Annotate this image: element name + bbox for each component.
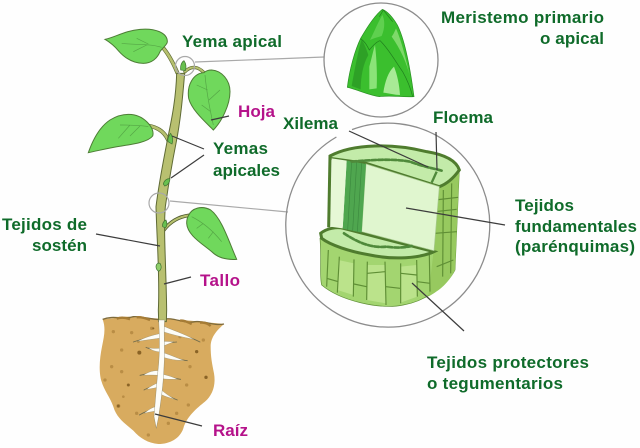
label: meristemo primario: Meristemo primario [441,8,604,27]
label: yema apical: Yema apical [182,32,282,51]
label: sosten: sostén [32,236,87,255]
label: tejidos protectores: Tejidos protectores [427,353,589,372]
label: tejidos: Tejidos [515,196,574,215]
circle: meristem detail [324,3,438,117]
inner left face [330,158,347,228]
leader lines [96,116,505,426]
leaf: middle left [88,114,153,153]
vascular ring [344,160,442,248]
connector: apical bud to top circle [195,57,324,62]
label: apicales: apicales [213,161,280,180]
leader: floema [436,132,437,170]
lower cut face [321,228,434,258]
leader: yemas 2 [171,155,204,178]
label: raiz: Raíz [213,421,248,440]
leaf: right hanging [188,70,230,130]
label: yemas apicales: Yemas [213,139,268,158]
label: hoja: Hoja [238,102,276,121]
label: floema: Floema [433,108,494,127]
label: tejidos de: Tejidos de [2,215,87,234]
leaf: top left [105,29,167,63]
petioles [148,47,204,231]
circle: stem section detail [286,123,490,327]
leader: tejidos protectores [412,283,464,331]
outer tissue [320,170,459,306]
label: parenquimas: (parénquimas) [515,237,635,256]
detail circles on plant [149,56,194,213]
leader: raiz [155,414,202,426]
leader: tallo [164,277,191,284]
connector: stem to big circle [170,201,288,212]
stem cross section [320,146,459,306]
label: o apical: o apical [540,29,604,48]
label: tallo: Tallo [200,271,240,290]
soil [100,317,224,444]
label: xilema: Xilema [283,114,339,133]
leader: hoja [211,116,229,120]
icon: apical meristem [347,9,414,97]
parenchyma face [362,164,439,251]
label: o tegumentarios: o tegumentarios [427,374,563,393]
leaf: lower right [187,208,237,259]
stem [156,73,185,322]
root system [133,320,200,428]
leader: tejidos fundamentales [406,208,505,225]
top cut face [330,146,459,187]
plant stem and leaves [88,29,237,322]
xylem band [343,161,366,233]
main root [154,320,165,428]
leader: sosten [96,234,160,246]
buds [181,61,186,71]
leader: yemas 1 [172,136,204,149]
leader: xilema [349,131,428,167]
label: fundamentales: fundamentales [515,217,637,236]
